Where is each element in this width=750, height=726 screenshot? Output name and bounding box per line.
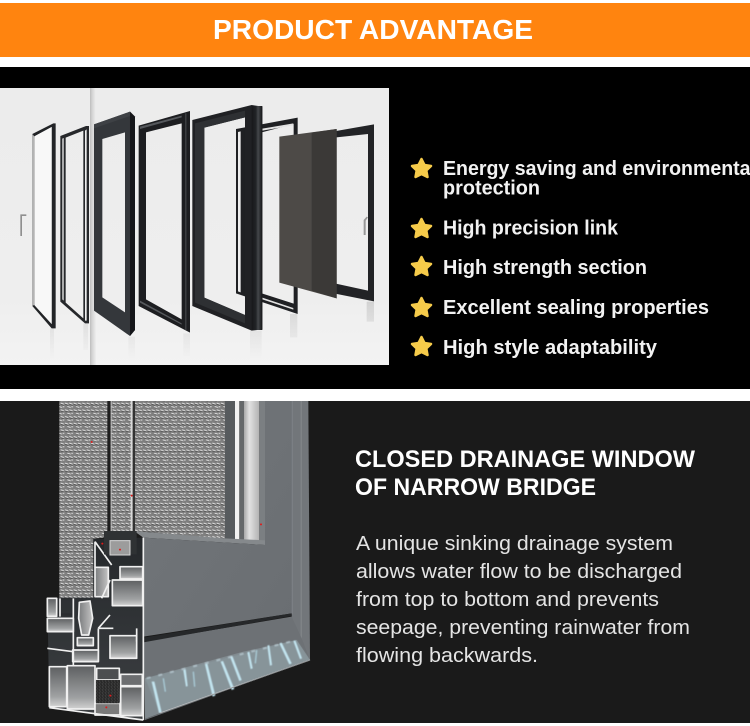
image: window profile cross-section [47,401,310,720]
description text: from top to bottom and prevents [356,589,659,611]
water sheet [145,640,310,719]
description text: A unique sinking drainage system [356,533,673,555]
mesh screen [279,129,337,298]
description text: allows water flow to be discharged [356,561,682,583]
heading [355,446,695,501]
heading: CLOSED DRAINAGE WINDOW [355,446,695,473]
heading: OF NARROW BRIDGE [355,474,596,501]
feature: sealing: Excellent sealing properties [443,297,709,319]
description text: flowing backwards. [356,645,538,667]
sill highlight [134,531,265,545]
panel: product advantages [0,67,750,389]
handle, left [20,214,26,236]
frame 7 [300,124,374,301]
front face panel [143,401,292,637]
profile cross-section [47,441,262,720]
feature: energy saving [412,158,750,200]
image: exploded window frame components [0,88,389,365]
feature: strength section: High strength section [443,257,647,279]
handle, right [364,217,368,235]
feature: energy saving: protection [443,178,540,200]
frame 3 [94,112,135,336]
title: PRODUCT ADVANTAGE [213,14,533,45]
mesh screen [59,401,225,598]
orange title banner [0,3,750,57]
feature: precision link: High precision link [443,218,619,240]
panel: closed drainage window [0,401,750,723]
frame 5 [192,105,262,331]
glass edge and reveal [225,401,235,539]
lower rail [143,617,310,720]
feature: style adaptability: High style adaptability [443,337,658,359]
frame 2 [60,126,89,323]
feature list [412,158,750,359]
description text [356,533,690,667]
frame 4 [139,111,190,333]
frame 6 [236,118,298,314]
frame 1 [32,123,56,328]
description text: seepage, preventing rainwater from [356,617,690,639]
